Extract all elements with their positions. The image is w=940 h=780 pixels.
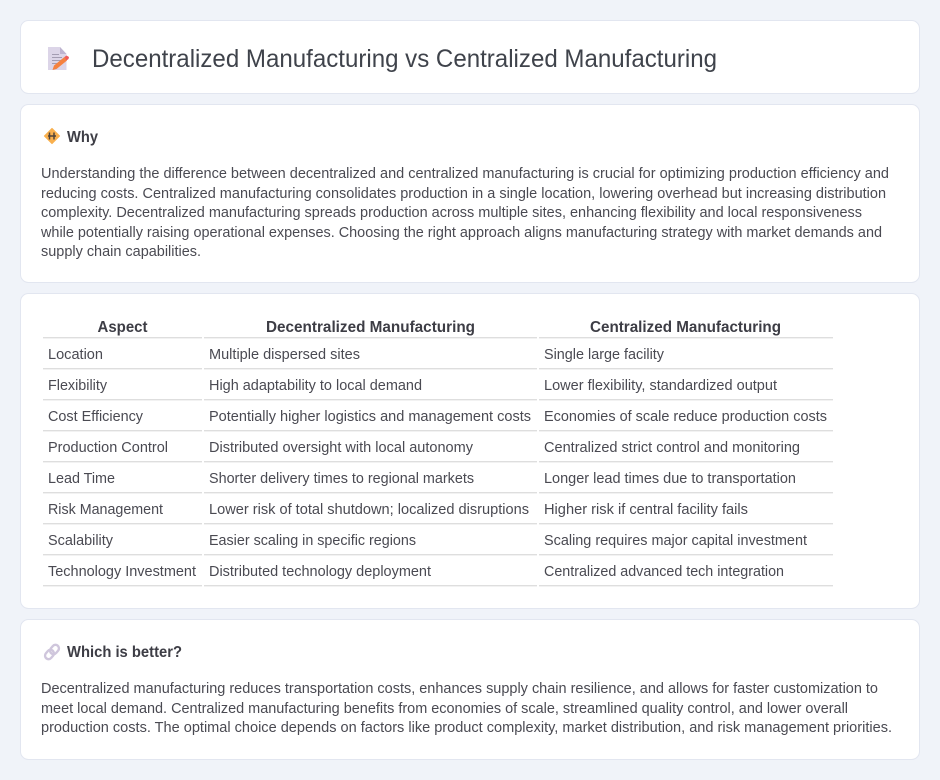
row: flexibility: High adaptability to local demand xyxy=(209,378,422,394)
row: technology investment: Technology Investment xyxy=(48,564,196,580)
row: production control: Centralized strict control and monitoring xyxy=(544,440,800,456)
row: scalability xyxy=(48,533,807,549)
row: lead time: Longer lead times due to transportation xyxy=(544,471,796,487)
row: scalability: Scalability xyxy=(48,533,114,549)
row: production control xyxy=(48,440,800,456)
row: cost efficiency xyxy=(48,409,827,425)
text block: why paragraph: complexity. Decentralized manufacturing spreads production across multiple sites, enhancing flexibility and local responsiveness xyxy=(41,205,862,221)
icon: memo document with pencil xyxy=(48,47,69,70)
text block: why paragraph: supply chain capabilities. xyxy=(41,244,201,260)
heading: why: Why xyxy=(67,129,98,146)
table header row: Decentralized Manufacturing xyxy=(266,319,475,336)
panel: title header xyxy=(20,20,920,94)
row: technology investment xyxy=(48,564,784,580)
row: technology investment: Centralized advanced tech integration xyxy=(544,564,784,580)
row: location: Multiple dispersed sites xyxy=(209,347,360,363)
table header row xyxy=(98,319,781,336)
text block: why paragraph xyxy=(40,166,889,260)
row: flexibility: Lower flexibility, standardized output xyxy=(544,378,777,394)
heading: which is better: Which is better? xyxy=(67,644,182,661)
row: technology investment: Distributed technology deployment xyxy=(209,564,431,580)
row: risk management xyxy=(48,502,748,518)
table header row: Centralized Manufacturing xyxy=(590,319,781,336)
row: risk management: Higher risk if central facility fails xyxy=(544,502,748,518)
text block: why paragraph: reducing costs. Centralized manufacturing consolidates production in a single location, lowering overhead but increasing distribution xyxy=(41,186,886,202)
row: scalability: Scaling requires major capital investment xyxy=(544,533,807,549)
row: location: Location xyxy=(48,347,103,363)
icon: chain link xyxy=(44,643,60,661)
row: production control: Distributed oversight with local autonomy xyxy=(209,440,474,456)
row: lead time: Lead Time xyxy=(48,471,115,487)
text block: why paragraph: Understanding the difference between decentralized and centralized manufacturing is crucial for optimizing production efficiency and xyxy=(41,166,889,182)
panel: which is better xyxy=(20,620,920,760)
text block: which is better paragraph: meet local demand. Centralized manufacturing benefits from economies of scale, streamlined quality control, and lower overall xyxy=(41,701,848,717)
row: production control: Production Control xyxy=(48,440,168,456)
row: flexibility xyxy=(48,378,777,394)
row: location xyxy=(48,347,665,363)
icon: orange diamond sign xyxy=(44,128,60,144)
text block: which is better paragraph: production costs. The optimal choice depends on factors like product complexity, market distribution, and risk management priorities. xyxy=(41,720,892,736)
text block: which is better paragraph xyxy=(41,681,892,736)
text block: which is better paragraph: Decentralized manufacturing reduces transportation costs, enhances supply chain resilience, and allows for faster customization to xyxy=(41,681,878,697)
row: flexibility: Flexibility xyxy=(48,378,108,394)
row: risk management: Lower risk of total shutdown; localized disruptions xyxy=(209,502,529,518)
panel: comparison table xyxy=(20,294,920,608)
panel: why xyxy=(20,104,920,282)
row: cost efficiency: Potentially higher logistics and management costs xyxy=(209,409,531,425)
row: location: Single large facility xyxy=(544,347,665,363)
table header row: Aspect xyxy=(98,319,148,336)
row: risk management: Risk Management xyxy=(48,502,163,518)
row: cost efficiency: Cost Efficiency xyxy=(48,409,144,425)
row: cost efficiency: Economies of scale reduce production costs xyxy=(544,409,827,425)
text block: why paragraph: while potentially raising operational expenses. Choosing the right approach aligns manufacturing strategy with market demands and xyxy=(40,225,882,241)
row: lead time xyxy=(48,471,796,487)
row: lead time: Shorter delivery times to regional markets xyxy=(209,471,474,487)
title: Decentralized Manufacturing vs Centralized Manufacturing xyxy=(92,45,717,73)
row: scalability: Easier scaling in specific regions xyxy=(209,533,416,549)
